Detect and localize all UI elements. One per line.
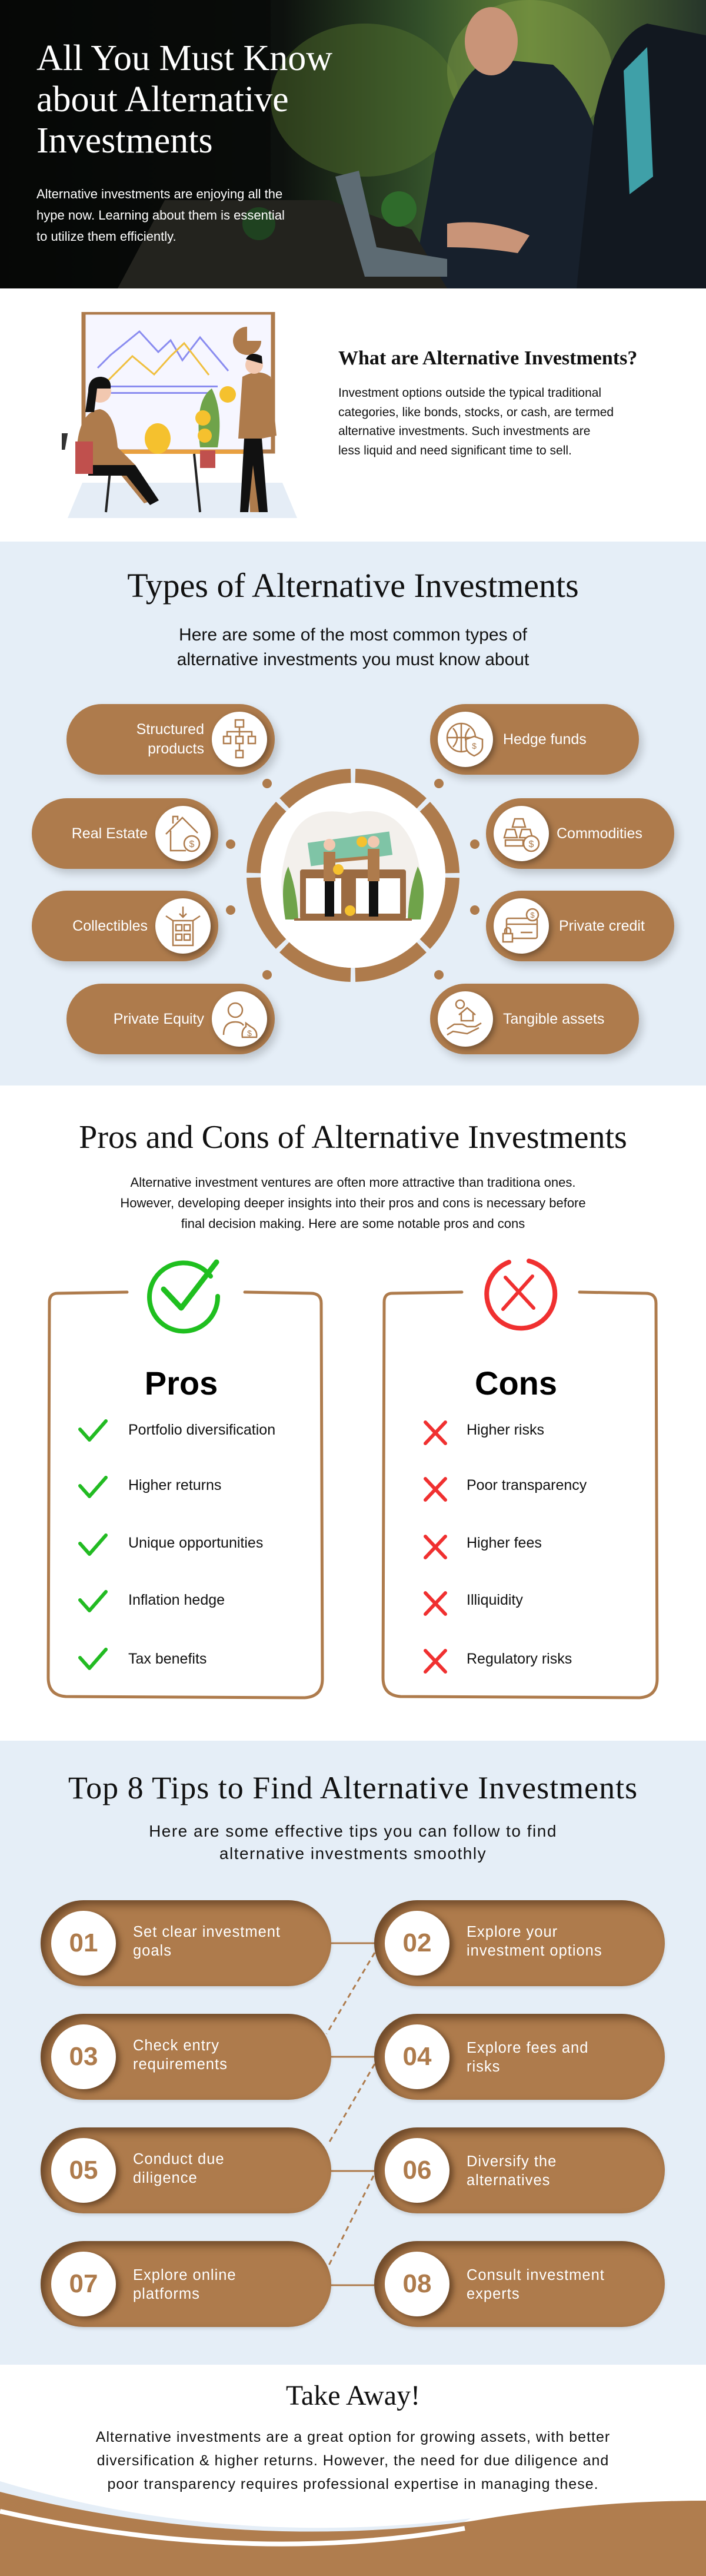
panel: cons (381, 1259, 659, 1699)
tip 08: 08 (403, 2269, 431, 2298)
pill: tangible assets (430, 984, 639, 1054)
tip 07: 07 (69, 2269, 98, 2298)
hero banner (0, 0, 706, 288)
heading: pros and cons: Pros and Cons of Alternative Investments (79, 1119, 627, 1156)
pill: commodities: Commodities (557, 825, 642, 842)
pill: commodities (486, 798, 674, 869)
center graphic: ring with handshake illustration (247, 769, 459, 982)
list: cons items: Poor transparency (467, 1477, 587, 1493)
list: cons items: Illiquidity (467, 1592, 523, 1608)
tip 06: 06 (403, 2156, 431, 2185)
tip 02: Explore your (467, 1924, 558, 1940)
text: pros and cons intro: Alternative investment ventures are often more attractive than traditiona ones. (131, 1175, 575, 1190)
icon: gold bars (494, 806, 549, 861)
hero subtitle: hype now. Learning about them is essential (36, 208, 285, 223)
connector dots (226, 779, 479, 980)
heading: cons: Cons (475, 1365, 557, 1402)
pill: private credit (486, 891, 674, 961)
list: cons items (424, 1420, 587, 1674)
tip 01: Set clear investment (133, 1924, 281, 1940)
icon: card with lock (494, 898, 549, 954)
pill: structured products: products (148, 741, 204, 757)
pill: tangible assets: Tangible assets (503, 1010, 604, 1027)
icon: globe shield (438, 712, 493, 767)
text: pros and cons intro: final decision making. Here are some notable pros and cons (181, 1216, 525, 1231)
text: definition: less liquid and need significant time to sell. (338, 444, 572, 457)
icon: green check circle (147, 1260, 220, 1334)
pill: collectibles (32, 891, 218, 961)
illustration: people with chart (62, 312, 297, 518)
tip 06: alternatives (467, 2172, 550, 2189)
list: cons items: Regulatory risks (467, 1651, 572, 1667)
pill: private credit: Private credit (559, 917, 645, 934)
hero subtitle (36, 187, 285, 244)
text: definition: alternative investments. Such investments are (338, 424, 590, 438)
tip 03 (41, 2014, 331, 2100)
tip 02: 02 (403, 1928, 431, 1957)
tip 04: risks (467, 2059, 500, 2075)
panel: top 8 tips (0, 1741, 706, 2365)
heading: take away: Take Away! (286, 2380, 420, 2411)
list: pros items: Tax benefits (128, 1651, 207, 1667)
subtitle: tips: alternative investments smoothly (219, 1844, 487, 1863)
icon: hierarchy (212, 712, 267, 767)
panel: pros (47, 1260, 324, 1699)
tip 07 (41, 2241, 331, 2327)
icon: card with lock: $ (530, 911, 535, 919)
tip 04 (374, 2014, 665, 2100)
tip 05 (41, 2127, 331, 2213)
panel: types of alternative investments (0, 542, 706, 1085)
icon: red x circle (484, 1259, 558, 1330)
icon: person with money bag (212, 991, 267, 1047)
pill: hedge funds: Hedge funds (503, 731, 587, 748)
footer wave (0, 2481, 706, 2576)
text: take away: diversification & higher returns. However, the need for due diligence and (97, 2452, 609, 2469)
subtitle: types: Here are some of the most common types of (179, 625, 527, 645)
tip 01 (41, 1900, 331, 1986)
tip 07: Explore online (133, 2267, 237, 2283)
tip 05: Conduct due (133, 2151, 225, 2167)
text: pros and cons intro: However, developing deeper insights into their pros and cons is necessary before (120, 1196, 586, 1210)
list: pros items: Higher returns (128, 1477, 221, 1493)
list: pros items: Portfolio diversification (128, 1422, 275, 1438)
tip 08: Consult investment (467, 2267, 605, 2283)
tip 06: Diversify the (467, 2153, 557, 2170)
connectors (326, 1943, 375, 2286)
tip 07: platforms (133, 2286, 200, 2302)
pill: hedge funds (430, 704, 639, 775)
text: take away (95, 2429, 610, 2492)
heading: types: Types of Alternative Investments (127, 566, 579, 605)
hero title: All You Must Know about Alternative Investments (36, 38, 332, 161)
subtitle: types: alternative investments you must know about (177, 650, 529, 669)
hero photo approximation (118, 0, 706, 288)
tip 03: requirements (133, 2056, 228, 2073)
list: pros items: Unique opportunities (128, 1535, 263, 1551)
tip 04: 04 (403, 2042, 431, 2071)
tip 01: goals (133, 1943, 172, 1959)
icon: house: $ (189, 839, 195, 849)
hero subtitle: to utilize them efficiently. (36, 229, 176, 244)
tip 06 (374, 2127, 665, 2213)
list: cons items: Higher risks (467, 1422, 544, 1438)
tip 02 (374, 1900, 665, 1986)
heading: what are alternative investments: What are Alternative Investments? (338, 347, 637, 369)
tip 02: investment options (467, 1943, 602, 1959)
pill: structured products: Structured (136, 721, 204, 738)
icon: gold bars: $ (529, 839, 534, 849)
pill: real estate (32, 798, 218, 869)
subtitle: types (177, 625, 530, 669)
heading: tips: Top 8 Tips to Find Alternative Investments (68, 1770, 638, 1805)
text: definition (338, 386, 614, 457)
icon: person with money bag: $ (247, 1028, 252, 1038)
heading: pros: Pros (145, 1365, 218, 1402)
list: pros items: Inflation hedge (128, 1592, 225, 1608)
tip 05: 05 (69, 2156, 98, 2185)
pill: private equity (66, 984, 275, 1054)
icon: globe shield: $ (472, 741, 477, 751)
text: definition: categories, like bonds, stocks, or cash, are termed (338, 405, 614, 419)
tip 03: 03 (69, 2042, 98, 2071)
pill: private equity: Private Equity (114, 1010, 204, 1027)
icon: house (155, 806, 211, 861)
hero subtitle: Alternative investments are enjoying all the (36, 187, 282, 201)
icon: hand with house (438, 991, 493, 1047)
tip 01: 01 (69, 1928, 98, 1957)
pill: collectibles: Collectibles (72, 917, 148, 934)
subtitle: tips (149, 1822, 557, 1863)
text: definition: Investment options outside the typical traditional (338, 386, 601, 400)
tip 08: experts (467, 2286, 520, 2302)
list: pros items (78, 1419, 275, 1670)
list: cons items: Higher fees (467, 1535, 542, 1551)
tip 03: Check entry (133, 2037, 219, 2054)
subtitle: tips: Here are some effective tips you can follow to find (149, 1822, 557, 1840)
text: take away: Alternative investments are a great option for growing assets, with better (96, 2429, 610, 2445)
tip 08 (374, 2241, 665, 2327)
pill: real estate: Real Estate (72, 825, 148, 842)
text: take away: poor transparency requires professional expertise in managing these. (107, 2476, 599, 2492)
icon: box (155, 898, 211, 954)
pill: structured products (66, 704, 275, 775)
text: pros and cons intro (120, 1175, 586, 1231)
tip 05: diligence (133, 2170, 198, 2186)
tip 04: Explore fees and (467, 2040, 588, 2056)
